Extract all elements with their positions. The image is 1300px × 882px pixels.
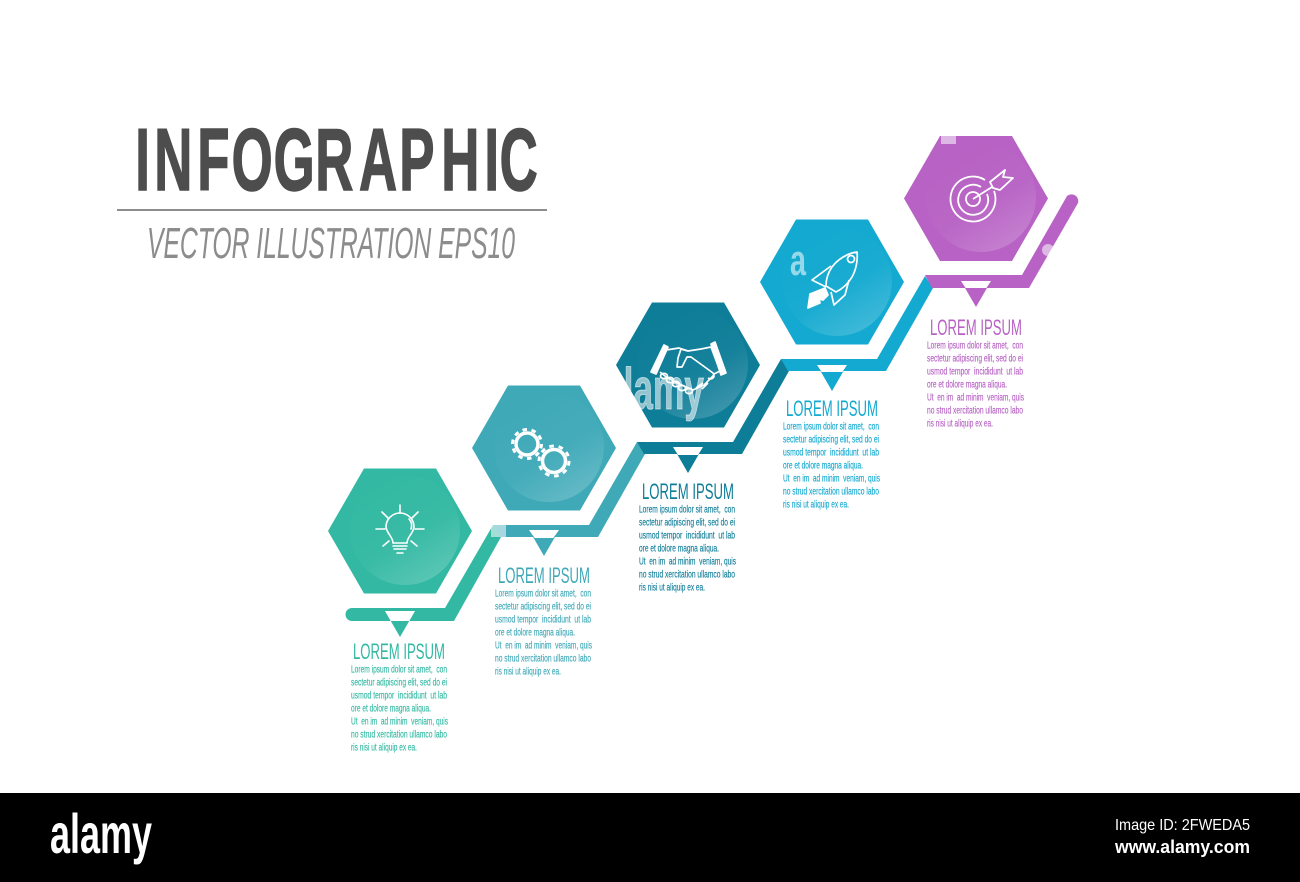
text block 4: Ut en im ad minim veniam, quis <box>783 472 880 484</box>
text block 1: ore et dolore magna aliqua. <box>351 702 431 714</box>
hexagon 1 <box>328 468 472 594</box>
text block 5: usmod tempor incididunt ut lab <box>927 366 1023 378</box>
text block 2 <box>495 588 592 678</box>
text block 3: no strud xercitation ullamco labo <box>639 568 735 580</box>
text block 2: ore et dolore magna aliqua. <box>495 626 575 638</box>
heading 4: LOREM IPSUM <box>786 396 878 421</box>
text block 3 <box>639 504 736 594</box>
text block 1: usmod tempor incididunt ut lab <box>351 690 447 702</box>
text block 3: Ut en im ad minim veniam, quis <box>639 556 736 568</box>
footer bar <box>0 793 1300 882</box>
icon: light bulb <box>376 505 424 553</box>
text block 1 <box>351 664 448 754</box>
hexagon 4 <box>760 220 904 344</box>
text block 4: usmod tempor incididunt ut lab <box>783 446 879 458</box>
text block 3: usmod tempor incididunt ut lab <box>639 530 735 542</box>
text block 2: ris nisi ut aliquip ex ea. <box>495 666 561 678</box>
text block 1: sectetur adipiscing elit, sed do ei <box>351 676 447 688</box>
text block 2: Lorem ipsum dolor sit amet, con <box>495 588 591 600</box>
hexagon 2 <box>472 386 616 510</box>
text block 4: no strud xercitation ullamco labo <box>783 486 879 498</box>
ribbon 4 <box>781 276 933 371</box>
step 1: idea <box>328 468 501 754</box>
text block 5: Ut en im ad minim veniam, quis <box>927 392 1024 404</box>
watermark fragments: a <box>790 236 806 285</box>
text block 4: Lorem ipsum dolor sit amet, con <box>783 420 879 432</box>
footer logo: alamy <box>50 802 152 865</box>
text block 1: ris nisi ut aliquip ex ea. <box>351 742 417 754</box>
icon: rocket <box>808 252 857 308</box>
ribbon 5 <box>925 194 1078 288</box>
icon: handshake <box>651 342 726 394</box>
text block 2: usmod tempor incididunt ut lab <box>495 614 591 626</box>
text block 5: ore et dolore magna aliqua. <box>927 378 1007 390</box>
ribbon 2 <box>493 442 645 537</box>
heading 5: LOREM IPSUM <box>930 315 1022 340</box>
text block 5: sectetur adipiscing elit, sed do ei <box>927 352 1023 364</box>
hexagon 3 <box>616 302 760 428</box>
text block 3: ore et dolore magna aliqua. <box>639 542 719 554</box>
heading 2: LOREM IPSUM <box>498 563 590 588</box>
subtitle: VECTOR ILLUSTRATION EPS10 <box>147 219 515 268</box>
pointer 1 <box>385 611 415 637</box>
text block 2: no strud xercitation ullamco labo <box>495 652 591 664</box>
text block 5: ris nisi ut aliquip ex ea. <box>927 418 993 430</box>
text block 4: sectetur adipiscing elit, sed do ei <box>783 434 879 446</box>
pointer 3 <box>673 447 703 473</box>
text block 1: Ut en im ad minim veniam, quis <box>351 716 448 728</box>
watermark: alamy: alamy <box>604 357 704 422</box>
text block 2: Ut en im ad minim veniam, quis <box>495 640 592 652</box>
icon: gears <box>512 430 569 476</box>
text block 5: Lorem ipsum dolor sit amet, con <box>927 340 1023 352</box>
text block 2: sectetur adipiscing elit, sed do ei <box>495 600 591 612</box>
step 5: target <box>904 136 1078 430</box>
heading 1: LOREM IPSUM <box>353 639 445 664</box>
pointer 4 <box>817 365 847 391</box>
text block 4: ore et dolore magna aliqua. <box>783 460 863 472</box>
heading 3: LOREM IPSUM <box>642 479 734 504</box>
step 3: handshake <box>604 302 789 594</box>
text block 3: ris nisi ut aliquip ex ea. <box>639 582 705 594</box>
text block 5: no strud xercitation ullamco labo <box>927 404 1023 416</box>
step 4: rocket <box>760 220 933 510</box>
icon: target <box>950 170 1013 222</box>
pointer 2 <box>529 530 559 556</box>
ribbon 3 <box>637 359 789 454</box>
step 2: gears <box>472 386 645 678</box>
text block 5 <box>927 340 1024 430</box>
text block 4 <box>783 420 880 510</box>
title: INFOGRAPHIC <box>135 111 538 209</box>
ribbon 1 <box>346 525 501 621</box>
text block 1: no strud xercitation ullamco labo <box>351 728 447 740</box>
text block 3: sectetur adipiscing elit, sed do ei <box>639 516 735 528</box>
image id: Image ID: 2FWEDA5 <box>1115 817 1250 834</box>
text block 1: Lorem ipsum dolor sit amet, con <box>351 664 447 676</box>
website: www.alamy.com <box>1114 837 1250 857</box>
text block 3: Lorem ipsum dolor sit amet, con <box>639 504 735 516</box>
text block 4: ris nisi ut aliquip ex ea. <box>783 498 849 510</box>
pointer 5 <box>961 281 991 307</box>
hexagon 5 <box>904 136 1048 261</box>
watermark fragments <box>491 136 1054 537</box>
